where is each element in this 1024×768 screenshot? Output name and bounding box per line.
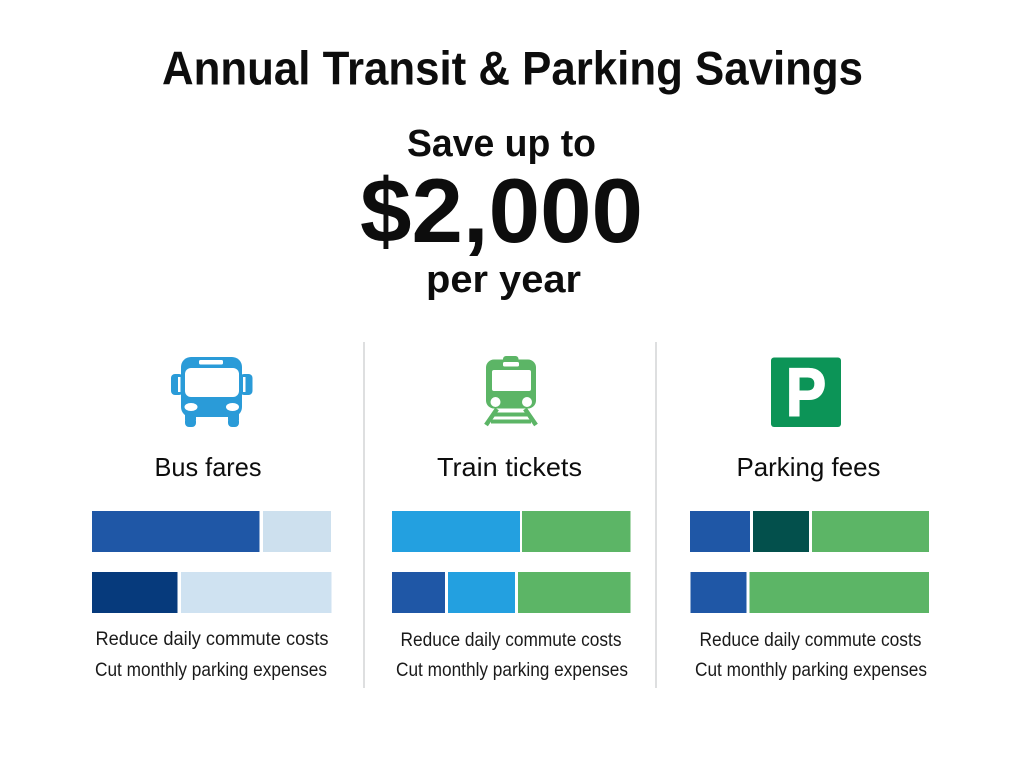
- save up to: Save up to: [407, 123, 596, 165]
- text: parking benefits: Cut monthly parking expenses: [695, 659, 927, 681]
- text: train benefits: Cut monthly parking expenses: [396, 659, 628, 681]
- bar chart: train tickets: [392, 511, 630, 613]
- icon: parking sign: P: [786, 354, 826, 430]
- text: train benefits: Reduce daily commute costs: [400, 629, 622, 651]
- text: train benefits: [396, 629, 628, 681]
- amount: $2,000: [360, 161, 643, 262]
- panel: train tickets: [392, 356, 630, 681]
- text: parking benefits: [695, 629, 927, 681]
- icon: parking sign: [771, 354, 841, 430]
- per year: per year: [426, 259, 581, 301]
- panel: bus fares: [92, 357, 332, 681]
- bar chart: parking fees: [690, 511, 929, 613]
- icon: bus: [171, 357, 252, 427]
- heading: train tickets: Train tickets: [437, 452, 582, 482]
- text: bus benefits: [95, 628, 329, 681]
- text: parking benefits: Reduce daily commute costs: [700, 629, 922, 651]
- text: bus benefits: Cut monthly parking expenses: [95, 659, 327, 681]
- heading: parking fees: Parking fees: [736, 452, 880, 482]
- savings callout: [360, 123, 643, 301]
- bar chart: bus fares: [92, 511, 332, 613]
- icon: train: [486, 356, 536, 425]
- heading: bus fares: Bus fares: [154, 452, 262, 482]
- panel: parking fees: [690, 354, 929, 681]
- title: Annual Transit & Parking Savings: [162, 42, 863, 94]
- text: bus benefits: Reduce daily commute costs: [96, 628, 329, 650]
